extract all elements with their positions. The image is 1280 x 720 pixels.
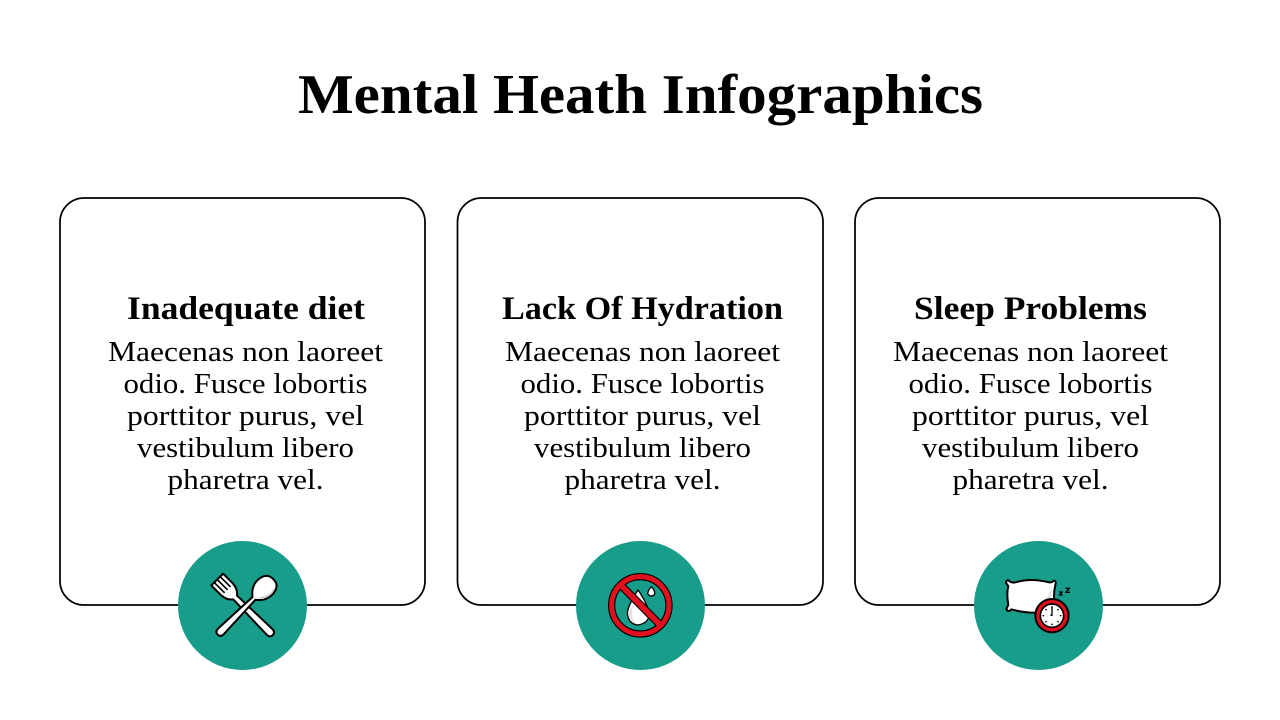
- text block: sleep problems: pharetra vel.: [952, 465, 1108, 496]
- text block: lack of hydration: pharetra vel.: [564, 465, 720, 496]
- text block: sleep problems: porttitor purus, vel: [912, 401, 1149, 432]
- text block: inadequate diet: Maecenas non laoreet: [108, 337, 383, 368]
- heading: lack of hydration: Lack Of Hydration: [502, 291, 783, 327]
- panel: lack of hydration: [458, 198, 823, 670]
- text block: sleep problems: [893, 337, 1168, 496]
- text block: lack of hydration: porttitor purus, vel: [524, 401, 761, 432]
- panel: inadequate diet: [60, 198, 425, 670]
- card outline: sleep problems: [855, 198, 1220, 605]
- text block: sleep problems: odio. Fusce lobortis: [908, 369, 1152, 400]
- card outline: lack of hydration: [458, 198, 823, 605]
- icon: pillow and clock: [974, 541, 1103, 670]
- heading: inadequate diet: Inadequate diet: [127, 291, 365, 327]
- text block: inadequate diet: porttitor purus, vel: [127, 401, 364, 432]
- title: Mental Heath Infographics: [298, 64, 983, 126]
- text block: inadequate diet: odio. Fusce lobortis: [124, 369, 368, 400]
- text block: lack of hydration: Maecenas non laoreet: [505, 337, 780, 368]
- text block: lack of hydration: [505, 337, 780, 496]
- heading: sleep problems: Sleep Problems: [914, 291, 1147, 327]
- text block: inadequate diet: pharetra vel.: [168, 465, 324, 496]
- card outline: inadequate diet: [60, 198, 425, 605]
- text block: inadequate diet: [108, 337, 383, 496]
- icon: fork and spoon: [178, 541, 307, 670]
- icon: crossed-out water drop: [576, 541, 705, 670]
- text block: inadequate diet: vestibulum libero: [137, 433, 354, 464]
- text block: sleep problems: vestibulum libero: [922, 433, 1139, 464]
- panel: sleep problems: [855, 198, 1220, 670]
- text block: lack of hydration: vestibulum libero: [534, 433, 751, 464]
- text block: lack of hydration: odio. Fusce lobortis: [520, 369, 764, 400]
- text block: sleep problems: Maecenas non laoreet: [893, 337, 1168, 368]
